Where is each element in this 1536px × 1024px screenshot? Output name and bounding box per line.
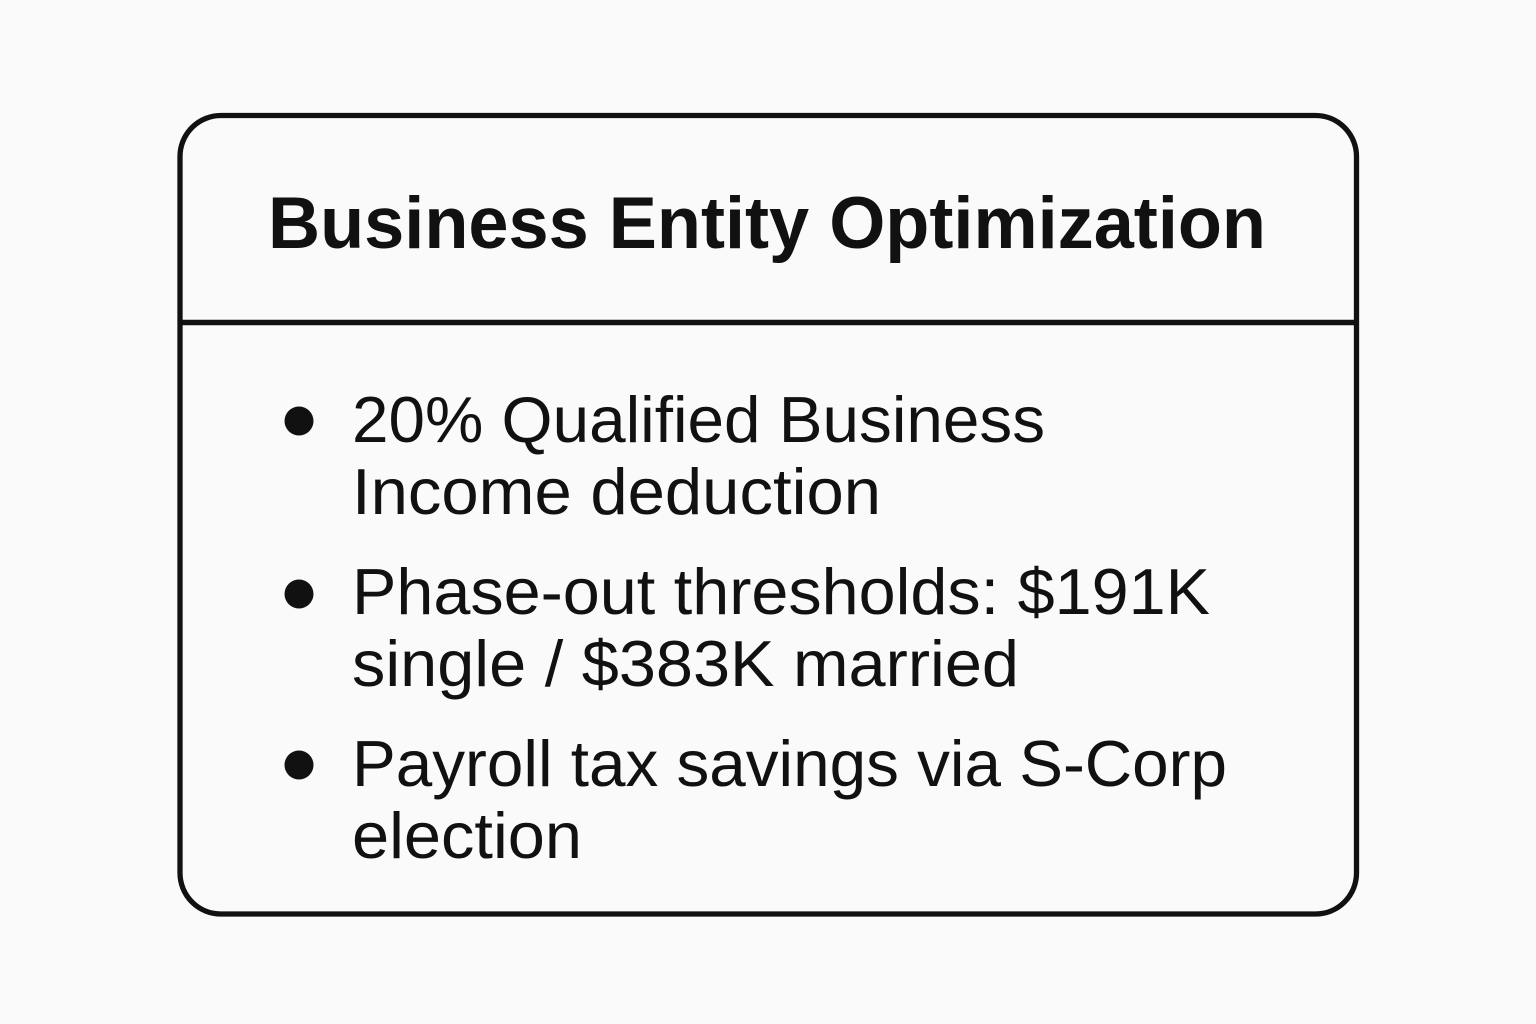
bullet item: QBI deduction: Income deduction	[352, 455, 881, 528]
bullet item: phase-out thresholds: Phase-out thresholds: $191K	[352, 555, 1210, 628]
bullet item: payroll tax savings: election	[352, 799, 582, 872]
bullet item: phase-out thresholds: single / $383K married	[352, 627, 1019, 700]
bullet item: phase-out thresholds	[284, 555, 1210, 700]
bullet item: QBI deduction	[284, 383, 1045, 528]
bullet item: QBI deduction: 20% Qualified Business	[352, 383, 1045, 456]
heading: Business Entity Optimization	[268, 183, 1266, 264]
bullet item: payroll tax savings: Payroll tax savings via S-Corp	[352, 727, 1227, 800]
panel: business entity optimization card	[180, 116, 1356, 914]
bullet item: payroll tax savings	[284, 727, 1227, 872]
